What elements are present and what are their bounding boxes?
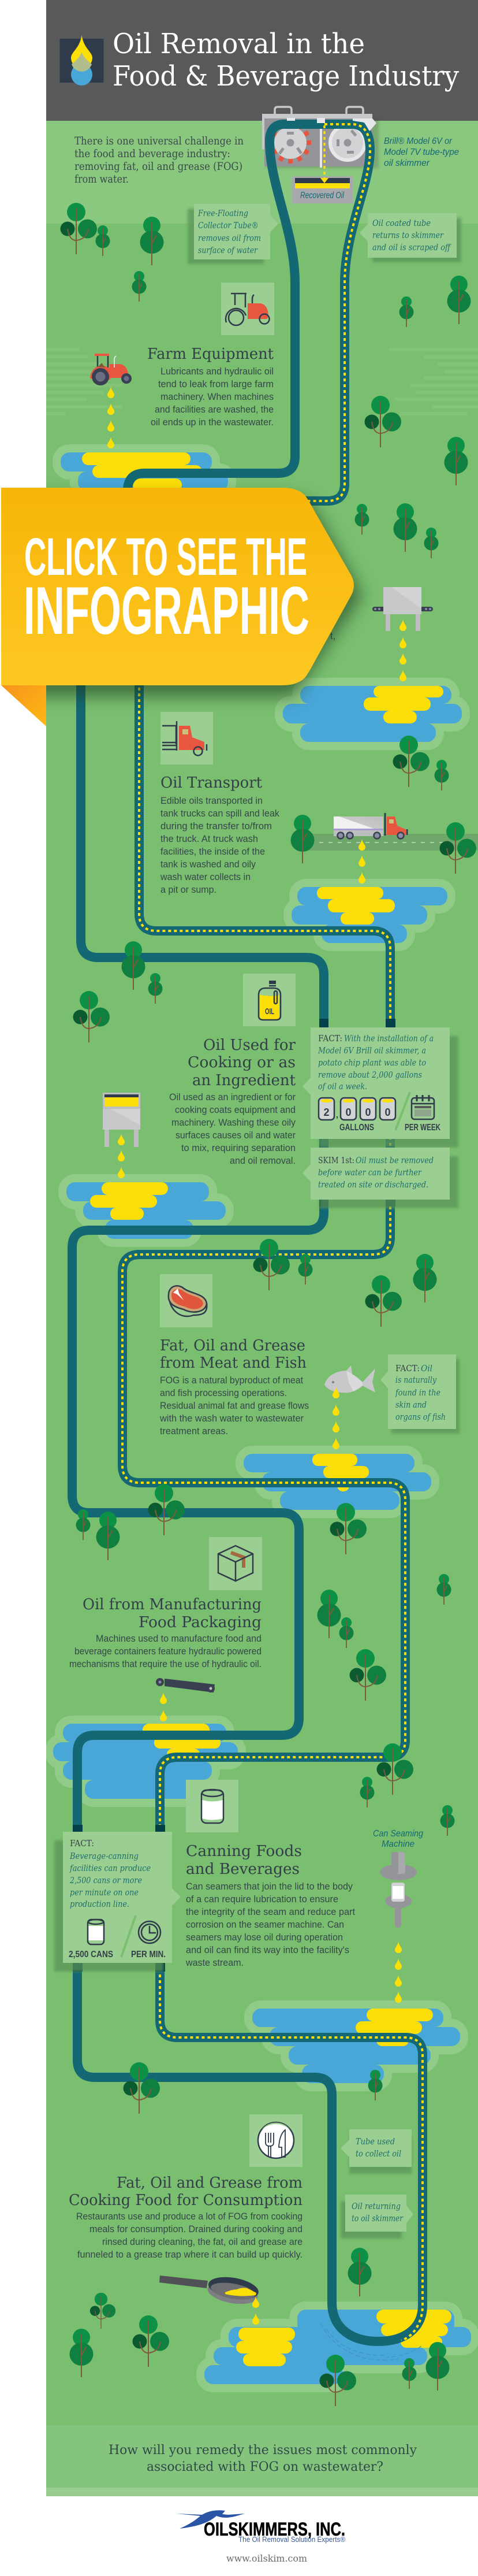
- callout: skim first: [303, 1148, 458, 1208]
- callout: canning fact: FACT:: [70, 1839, 94, 1849]
- icon: 2,000 gallons cans: 2: [323, 1107, 330, 1118]
- body text: oil ends up in the wastewater.: [151, 417, 274, 428]
- callout: free-floating collector tube: surface of water: [198, 246, 258, 255]
- section: canning: [185, 1780, 423, 2003]
- illustration: frying pan: [159, 2274, 260, 2307]
- callout: canning fact: 2,500 CANS: [69, 1950, 113, 1959]
- body text: Lubricants and hydraulic oil: [160, 366, 274, 377]
- callout: tube used to collect oil: [341, 2129, 412, 2174]
- background: light green intro band: [46, 121, 478, 224]
- body text: [159, 1375, 309, 1437]
- intro text: [74, 135, 244, 185]
- closing question: How will you remedy the issues most commonly: [109, 2443, 417, 2458]
- heading: from Meat and Fish: [160, 1354, 307, 1372]
- callout: 2,000 gallons fact: of oil a week.: [318, 1082, 367, 1092]
- skimmer unit body: [262, 107, 379, 168]
- section: food packaging: [69, 1537, 262, 1721]
- tree: [69, 2329, 94, 2377]
- body text: a pit or sump.: [160, 885, 216, 895]
- tree: [402, 2358, 417, 2389]
- illustration: can seaming machine: [380, 1852, 417, 1928]
- tree: [354, 504, 369, 534]
- pond: farm equipment: [53, 444, 236, 488]
- arrow: oil drips to tray: [320, 125, 328, 183]
- background: footer strip: [46, 2488, 478, 2496]
- oil drips: [333, 1387, 339, 1449]
- tube shade segments near callouts: [73, 1019, 395, 1972]
- tree: [447, 276, 471, 324]
- title text: Food & Beverage Industry: [113, 60, 459, 92]
- icon: clock: [139, 1921, 160, 1943]
- heading: Oil Transport: [160, 774, 263, 792]
- body text: Can seamers that join the lid to the body: [186, 1881, 353, 1892]
- body text: facilities, the inside of the: [160, 847, 265, 857]
- wordmark: OILSKIMMERS, INC.: [204, 2519, 345, 2540]
- tree: [320, 2355, 356, 2406]
- recovered oil tray: [292, 176, 353, 203]
- label: can seaming machine: Machine: [382, 1839, 414, 1849]
- body text: of a can require lubrication to ensure: [186, 1894, 338, 1905]
- icon tile: tractor: [221, 283, 274, 335]
- heading: [188, 1037, 296, 1089]
- section: farm equipment: [90, 283, 274, 448]
- tree: [339, 1617, 353, 1648]
- faint field stripes: [46, 348, 478, 415]
- heading: [83, 1596, 262, 1631]
- closing question: [109, 2443, 417, 2474]
- collector tube: oil dashes: [122, 124, 423, 2340]
- background: closing band: [46, 2425, 478, 2488]
- icon: 2,000 gallons cans: ,: [336, 1110, 338, 1119]
- body text: during the transfer to/from: [160, 821, 272, 832]
- tree: [90, 2293, 115, 2329]
- callout: skim first: treated on site or discharged.: [318, 1181, 428, 1190]
- callout: canning fact: [54, 1832, 181, 1972]
- section: meat and fish: [159, 1274, 375, 1449]
- section: oil for cooking: [103, 974, 296, 1178]
- body text: to mix, requiring separation: [181, 1143, 296, 1153]
- banner body: [1, 488, 354, 685]
- tree: [440, 1805, 455, 1836]
- callout: oil returning to skimmer: to oil skimmer: [352, 2214, 404, 2224]
- callout: 2,000 gallons fact: Model 6V Brill oil skimmer, a: [318, 1046, 426, 1056]
- callout: free-floating collector tube: Free-Floating: [197, 209, 248, 218]
- oil drips: [358, 839, 365, 884]
- tree: [434, 760, 449, 790]
- callout: 2,000 gallons fact: remove about 2,000 gallons: [318, 1071, 422, 1080]
- body text: [160, 796, 280, 895]
- tree: [133, 2315, 169, 2367]
- heading: [69, 2174, 303, 2209]
- callout: fish fact: FACT:: [395, 1364, 420, 1374]
- tree: [348, 2248, 372, 2296]
- illustration: hydraulic cylinder: [156, 1678, 215, 1692]
- body text: rinsed during cleaning, the fat, oil and grease are: [102, 2237, 303, 2247]
- body text: FOG is a natural byproduct of meat: [160, 1375, 303, 1386]
- callout: oil coated tube: [360, 213, 461, 262]
- callout: 2,000 gallons fact: PER WEEK: [405, 1123, 441, 1133]
- heading: Canning Foods: [186, 1843, 302, 1860]
- label: can seaming machine: [373, 1829, 423, 1849]
- callout: fish fact: [380, 1354, 460, 1434]
- trees: [60, 203, 476, 2406]
- section: cooking food: [69, 2114, 303, 2325]
- body text: cooking coats equipment and: [175, 1105, 296, 1115]
- callout: canning fact: 2,500 cans or more: [69, 1876, 142, 1885]
- title block: [60, 28, 459, 92]
- callout: skim first: before water can be further: [318, 1168, 422, 1178]
- banner shadow: [1, 497, 363, 696]
- body text: and fish processing operations.: [160, 1388, 287, 1398]
- icon tile: can: [186, 1780, 238, 1832]
- callout: fish fact: found in the: [395, 1389, 440, 1398]
- header bar: [46, 0, 478, 121]
- callout: oil returning to skimmer: [341, 2195, 413, 2239]
- body text: Edible oils transported in: [160, 796, 263, 806]
- icon: 2,000 gallons cans: 0: [345, 1107, 352, 1118]
- label: skimmer model: [384, 136, 459, 168]
- ponds: [53, 452, 471, 2384]
- banner: click to see the infographic: [1, 488, 363, 726]
- intro text: removing fat, oil and grease (FOG): [74, 160, 242, 173]
- callout: oil coated tube: returns to skimmer: [372, 231, 444, 240]
- callout: 2,000 gallons fact: [303, 1027, 458, 1148]
- recovered oil tray: Recovered Oil: [300, 191, 344, 201]
- heading: Cooking or as: [188, 1054, 296, 1071]
- illustration: fryer tank: [103, 1093, 140, 1147]
- title text: [113, 28, 459, 92]
- illustration: fish: [324, 1365, 375, 1393]
- tree: [148, 1484, 185, 1535]
- skimmer details: [287, 118, 376, 203]
- body text: beverage containers feature hydraulic powered: [74, 1646, 262, 1657]
- oil drips: [118, 1134, 125, 1178]
- bird mark: [176, 2510, 245, 2529]
- heading: Cooking Food for Consumption: [69, 2192, 303, 2209]
- label: skimmer model: oil skimmer: [384, 158, 430, 168]
- callout: canning fact: per minute on one: [70, 1888, 139, 1898]
- body text: treatment areas.: [160, 1426, 228, 1437]
- callout: 2,000 gallons fact: potato chip plant was able to: [318, 1059, 426, 1068]
- tree: [96, 225, 110, 256]
- callout: free-floating collector tube: [188, 204, 278, 264]
- oil drips: [107, 387, 114, 448]
- illustration: tank truck: [334, 813, 408, 839]
- tree: [424, 528, 439, 558]
- callout: oil returning to skimmer: Oil returning: [352, 2202, 401, 2211]
- tree: [318, 1590, 341, 1638]
- banner fold: [1, 685, 46, 726]
- icon tile: oil jug: [243, 974, 296, 1026]
- tree: [253, 1239, 290, 1290]
- icon tile: truck: [160, 712, 213, 764]
- tagline: The Oil Removal Solution Experts®: [238, 2536, 346, 2544]
- heading: Fat, Oil and Grease: [160, 1337, 305, 1354]
- collector tube: solid: [72, 124, 423, 2341]
- heading: Oil Used for: [203, 1037, 296, 1054]
- callout: oil coated tube: Oil coated tube: [372, 219, 431, 228]
- body text: mechanisms that require the use of hydraulic oil.: [69, 1659, 262, 1669]
- pond: food packaging: [53, 1724, 238, 1799]
- tree: [394, 503, 417, 552]
- body text: the integrity of the seam and reduce part: [186, 1907, 355, 1917]
- illustration: red tractor: [90, 354, 132, 385]
- body text: wash water collects in: [160, 872, 251, 882]
- body text: Oil used as an ingredient or for: [169, 1092, 296, 1103]
- pond: cooking oil: [66, 1182, 226, 1239]
- body text: surfaces causes oil and water: [175, 1130, 296, 1141]
- body text: waste stream.: [185, 1958, 244, 1968]
- body text: and oil can find its way into the facility's: [186, 1945, 349, 1955]
- background: main green field: [46, 224, 478, 2425]
- body text: [76, 2211, 303, 2260]
- icon tile: box: [209, 1537, 262, 1590]
- body text: and facilities are washed, the: [155, 404, 274, 415]
- label: can seaming machine: Can Seaming: [373, 1829, 423, 1839]
- body text: [151, 366, 274, 428]
- heading: Farm Equipment: [147, 346, 274, 363]
- body text: [69, 1634, 262, 1669]
- body text: machinery. When machines: [160, 392, 274, 402]
- tree: [376, 1743, 413, 1795]
- pond: cooking food: [204, 2310, 471, 2384]
- callout: fish fact: skin and: [395, 1401, 427, 1410]
- pond: canning: [252, 2009, 460, 2083]
- title text: Oil Removal in the: [113, 28, 365, 60]
- body text: tank is washed and oily: [160, 859, 256, 870]
- illustration: road: [308, 834, 478, 851]
- heading: and Beverages: [186, 1861, 300, 1878]
- icon: can: [88, 1920, 104, 1944]
- gear with red teeth: [270, 122, 311, 164]
- icon tile: oil jug: OIL: [265, 1007, 274, 1016]
- body text: tend to leak from large farm: [158, 379, 274, 389]
- body text: Machines used to manufacture food and: [96, 1634, 262, 1644]
- intro text: from water.: [74, 173, 129, 185]
- closing question: associated with FOG on wastewater?: [147, 2460, 383, 2474]
- callout: 2,000 gallons fact: GALLONS: [339, 1123, 374, 1133]
- callout: oil coated tube: and oil is scraped off: [372, 243, 451, 253]
- body text: seamers may lose oil during operation: [186, 1932, 343, 1943]
- icon: 2,000 gallons cans: 0: [384, 1107, 391, 1118]
- tree: [413, 1254, 436, 1302]
- website url: www.oilskim.com: [226, 2553, 307, 2564]
- tree: [140, 217, 164, 265]
- callout: skim first: SKIM 1st:: [318, 1156, 354, 1165]
- tree: [148, 973, 163, 1004]
- callout: canning fact: facilities can produce: [69, 1864, 151, 1873]
- body text: machinery. Washing these oily: [171, 1118, 296, 1128]
- callout: free-floating collector tube: removes oil from: [198, 234, 261, 243]
- icon: 2,000 gallons cans: [319, 1098, 395, 1120]
- heading: an Ingredient: [192, 1072, 296, 1089]
- tree: [399, 296, 413, 327]
- body text: and oil removal.: [230, 1156, 296, 1166]
- body text: with the wash water to wastewater: [159, 1413, 304, 1424]
- oil drips: [160, 1692, 167, 1721]
- illustration: oil drum machine: [372, 587, 433, 681]
- oil drips: [395, 1942, 402, 2003]
- hidden text fragment: t,: [330, 631, 335, 641]
- banner text: [24, 528, 309, 648]
- tree: [298, 1254, 313, 1285]
- tree: [330, 1503, 367, 1554]
- tree: [132, 271, 147, 302]
- tree: [440, 822, 476, 874]
- oil drips: [252, 2296, 259, 2325]
- body text: [169, 1092, 296, 1166]
- body text: corrosion on the seamer machine. Can: [186, 1920, 344, 1930]
- body text: Restaurants use and produce a lot of FOG from cooking: [76, 2211, 303, 2222]
- body text: Residual animal fat and grease flows: [160, 1401, 309, 1411]
- callout: tube used to collect oil: Tube used: [356, 2137, 395, 2147]
- tree: [121, 941, 145, 990]
- tree: [365, 396, 401, 447]
- icon tile: plate and cutlery: [249, 2114, 303, 2167]
- icon tile: steak: [160, 1274, 212, 1327]
- logo: Oil Skimmers Inc: [176, 2510, 346, 2544]
- intro text: the food and beverage industry:: [74, 147, 230, 160]
- tree: [73, 991, 110, 1042]
- heading: Fat, Oil and Grease from: [117, 2174, 303, 2192]
- callout: 2,000 gallons fact: With the installation of a: [344, 1034, 434, 1044]
- callout: canning fact: Beverage-canning: [69, 1852, 139, 1861]
- tree: [426, 2342, 449, 2391]
- callout: tube used to collect oil: to collect oil: [356, 2150, 401, 2159]
- callout: free-floating collector tube: Collector Tube®: [198, 221, 259, 231]
- tree: [124, 2062, 160, 2114]
- label: skimmer model: Model 7V tube-type: [384, 147, 459, 157]
- icon: 2,000 gallons cans: 0: [365, 1107, 371, 1118]
- tree: [445, 437, 468, 485]
- heading: Oil from Manufacturing: [83, 1596, 262, 1613]
- icon: oil and water drops: [60, 35, 104, 86]
- callout: canning fact: production line.: [70, 1900, 129, 1909]
- pond: meat and fish: [244, 1454, 431, 1510]
- tree: [60, 203, 97, 254]
- tree: [360, 1777, 374, 1807]
- callout: 2,000 gallons fact: FACT:: [318, 1034, 342, 1044]
- section: oil transport: [160, 712, 478, 895]
- tree: [291, 815, 314, 863]
- tree: [393, 736, 430, 787]
- pond: oil machine: [283, 686, 462, 742]
- heading: [160, 1337, 307, 1372]
- tree: [96, 1512, 120, 1560]
- body text: tank trucks can spill and leak: [160, 808, 280, 819]
- tree: [365, 1275, 402, 1327]
- heading: Food Packaging: [139, 1614, 262, 1631]
- tree: [76, 1509, 90, 1540]
- callout: fish fact: organs of fish: [395, 1413, 446, 1422]
- smooth drum: [328, 124, 367, 162]
- body text: [185, 1881, 355, 1968]
- label: skimmer model: Brill® Model 6V or: [384, 136, 453, 146]
- callout: fish fact: is naturally: [395, 1376, 437, 1385]
- callout: canning fact: PER MIN.: [131, 1950, 166, 1959]
- tree: [368, 2070, 382, 2100]
- callout: fish fact: Oil: [421, 1364, 432, 1374]
- intro text: There is one universal challenge in: [74, 135, 244, 147]
- icon: calendar: [412, 1095, 434, 1119]
- heading: [186, 1843, 302, 1878]
- body text: the truck. At truck wash: [160, 834, 258, 844]
- pond: oil transport: [292, 887, 447, 943]
- body text: funneled to a grease trap where it can build up quickly.: [77, 2250, 303, 2260]
- body text: meals for consumption. Drained during cooking and: [89, 2224, 303, 2234]
- tree: [436, 1574, 451, 1605]
- tree: [350, 1649, 386, 1701]
- callout: skim first: Oil must be removed: [356, 1156, 434, 1165]
